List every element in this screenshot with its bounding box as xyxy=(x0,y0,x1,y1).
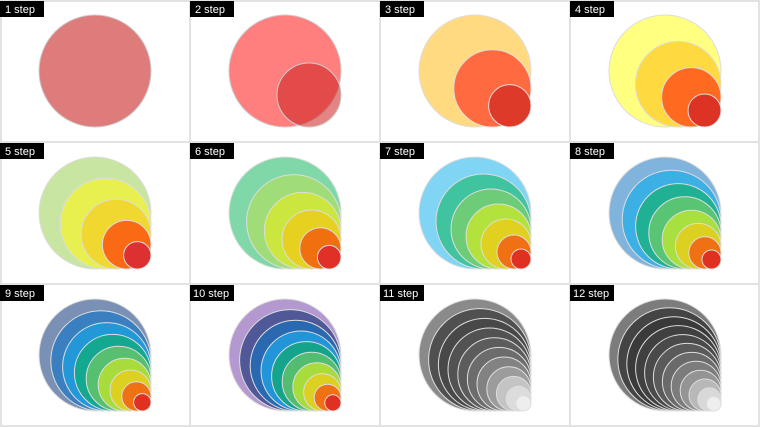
panel: 3 step: 3 step xyxy=(385,4,415,16)
panel: 3 step xyxy=(380,1,531,127)
panel: 4 step xyxy=(570,1,721,127)
panel: 7 step xyxy=(380,143,531,269)
panel: 12 step xyxy=(570,285,721,411)
panel: 10 step xyxy=(190,285,341,411)
panel: 1 step: 1 step xyxy=(5,4,35,16)
panel: 9 step xyxy=(0,285,151,411)
panel: 10 step: 10 step xyxy=(193,288,229,300)
panel: 12 step: 12 step xyxy=(573,288,609,300)
panel: 5 step: 5 step xyxy=(5,146,35,158)
panel: 11 step: 11 step xyxy=(383,288,418,300)
panel: 2 step xyxy=(190,1,341,127)
panel: 8 step xyxy=(570,143,721,269)
panel: 2 step: 2 step xyxy=(195,4,225,16)
panel: 6 step: 6 step xyxy=(195,146,225,158)
panel: 8 step: 8 step xyxy=(575,146,605,158)
panel: 5 step xyxy=(0,143,151,269)
panel: 7 step: 7 step xyxy=(385,146,415,158)
panel: 9 step: 9 step xyxy=(5,288,35,300)
panel: 1 step xyxy=(0,1,151,127)
panel: 11 step xyxy=(380,285,531,411)
panel: 4 step: 4 step xyxy=(575,4,605,16)
panel: 6 step xyxy=(190,143,341,269)
